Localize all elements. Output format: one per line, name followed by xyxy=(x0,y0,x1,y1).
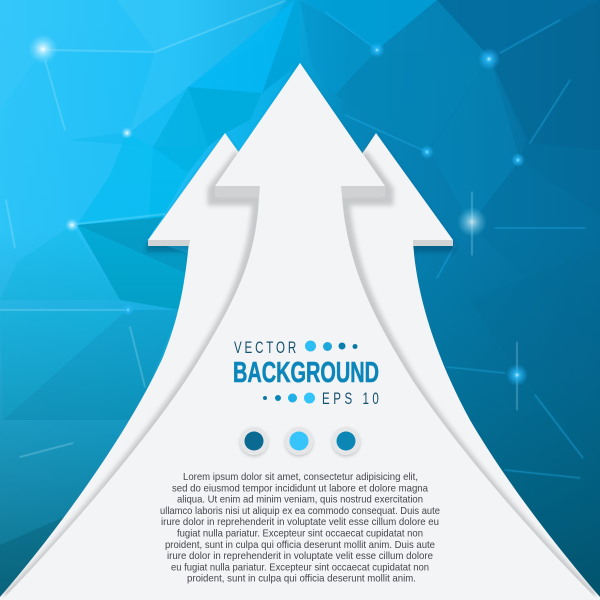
body text: irure dolor in reprehenderit in voluptate velit esse cillum dolore eu xyxy=(161,516,439,528)
body text: eu fugiat nulla pariatur. Excepteur sint occaecat cupidatat non xyxy=(171,561,429,573)
round buttons xyxy=(240,427,360,455)
body text: fugiat nulla pariatur. Excepteur sint occaecat cupidatat non xyxy=(177,528,423,540)
body text: proident, sunt in culpa qui officia deserunt mollit anim. Duis aute xyxy=(165,539,435,551)
light flares xyxy=(28,34,528,386)
center arrow left lip xyxy=(215,186,260,197)
right arrow lip xyxy=(413,240,453,246)
left arrow lip xyxy=(148,240,190,246)
body text: proident, sunt in culpa qui officia deserunt mollit anim. xyxy=(187,573,416,585)
title: BACKGROUND: BACKGROUND xyxy=(233,357,379,389)
body text: aliqua. Ut enim ad minim veniam, quis nostrud exercitation xyxy=(177,494,423,506)
title: VECTOR: VECTOR xyxy=(234,339,299,358)
center arrow right lip xyxy=(341,186,385,197)
dots row: bottom xyxy=(263,392,315,404)
dots row: top xyxy=(305,340,358,352)
light beams xyxy=(0,1,585,478)
arrowhead cast shadows xyxy=(146,66,455,300)
body text xyxy=(160,471,440,585)
body text: sed do eiusmod tempor incididunt ut labore et dolore magna xyxy=(172,482,428,494)
body text: ullamco laboris nisi ut aliquip ex ea commodo consequat. Duis aute xyxy=(160,505,440,517)
body text: irure dolor in reprehenderit in voluptate velit esse cillum dolore xyxy=(167,550,433,562)
body text: Lorem ipsum dolor sit amet, consectetur adipisicing elit, xyxy=(183,471,418,483)
center arrow shadow on side arrows xyxy=(7,154,593,597)
subtitle: EPS 10: EPS 10 xyxy=(322,390,382,409)
